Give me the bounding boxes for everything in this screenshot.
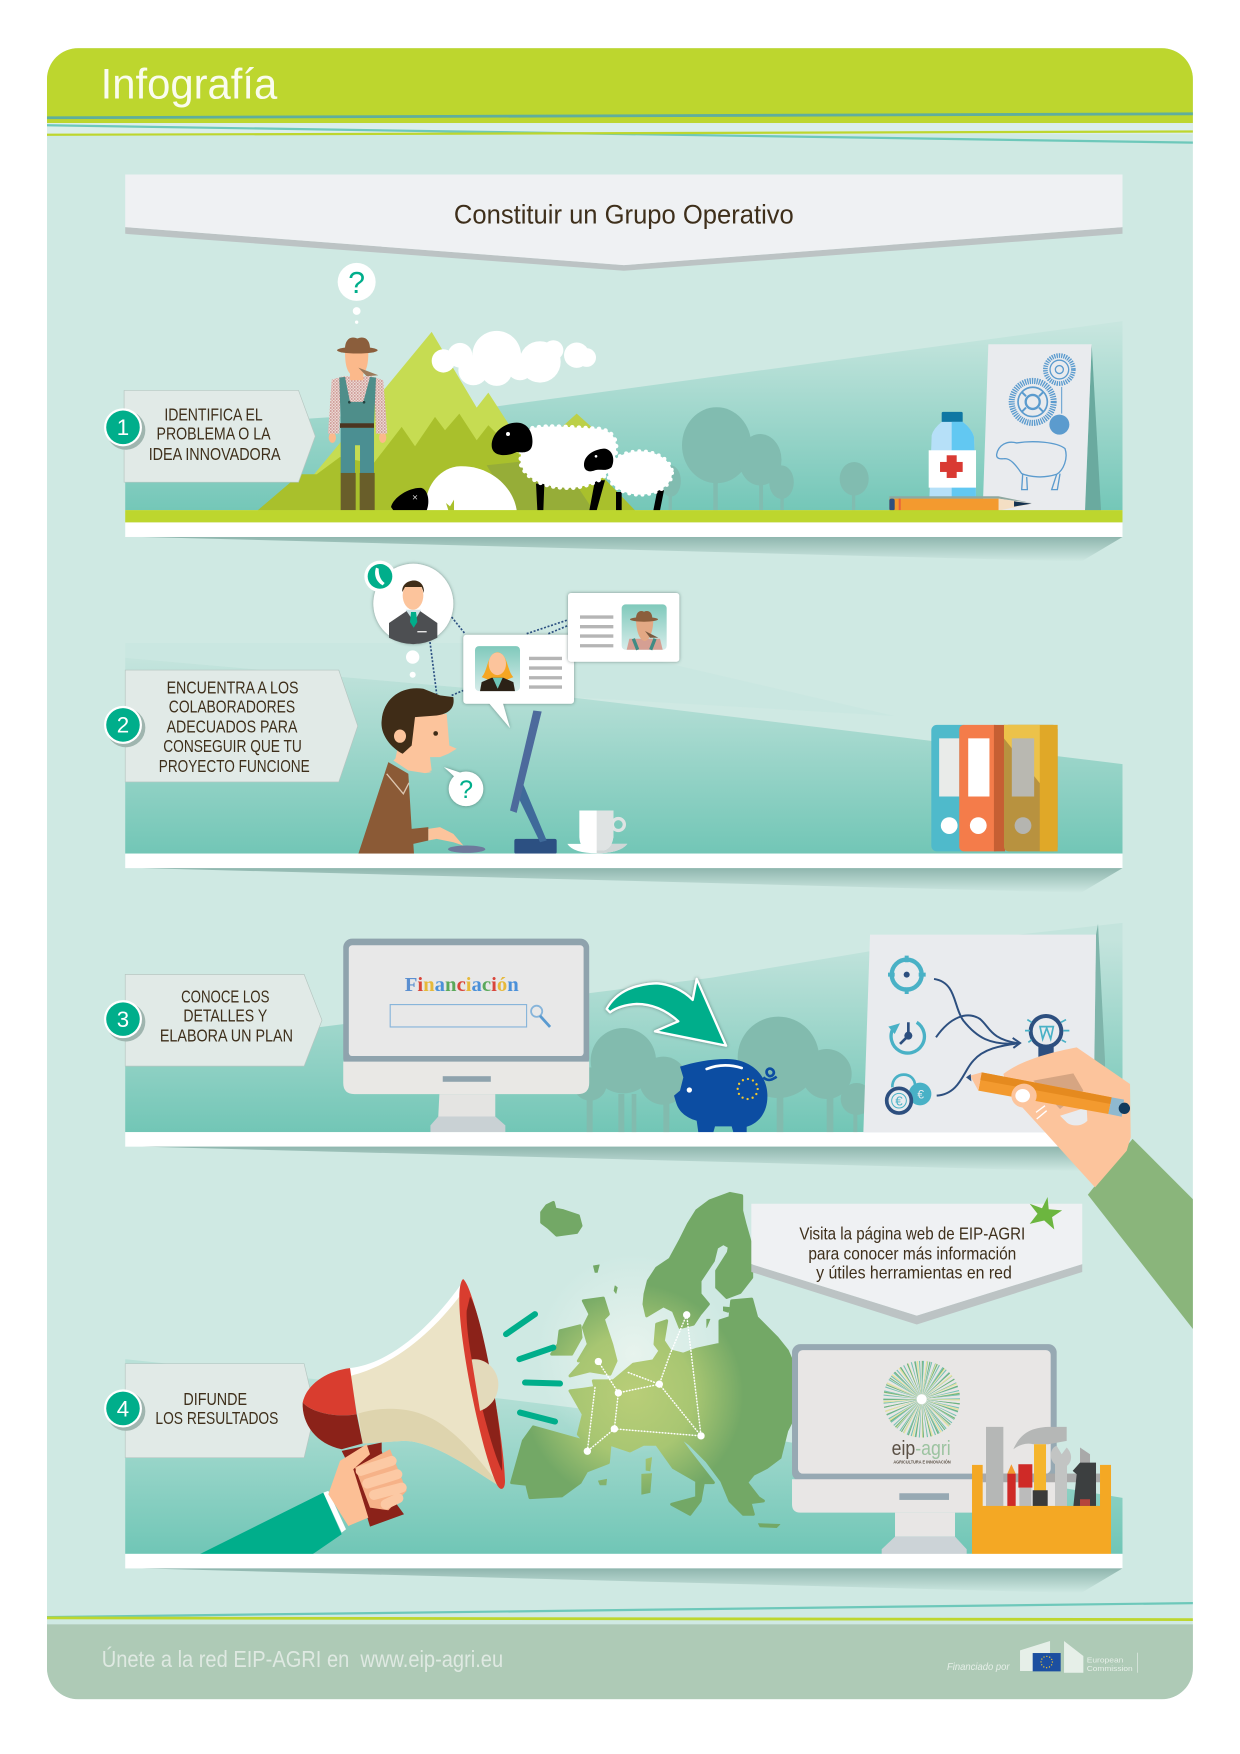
step 4 number: [104, 1389, 145, 1431]
contact card: woman: [463, 635, 574, 728]
step 4 label: LOS RESULTADOS: [155, 1408, 278, 1428]
icon: desktop monitor with search: [343, 939, 589, 1132]
step 3 label: ELABORA UN PLAN: [160, 1025, 293, 1046]
mountains: [258, 332, 635, 510]
step 4 number: 4: [117, 1396, 129, 1421]
icon: farmer: [328, 338, 387, 510]
banner: Constituir un Grupo Operativo: Constituir un Grupo Operativo: [454, 200, 794, 230]
step 2 number: [104, 706, 145, 747]
shelf: [125, 1554, 1122, 1593]
banner: Constituir un Grupo Operativo: [125, 175, 1122, 271]
icon: medicine bottle: [929, 412, 976, 499]
step 1 label: PROBLEMA O LA: [157, 424, 271, 444]
step 2 label: COLABORADORES: [169, 697, 295, 717]
question bubble: [338, 263, 376, 324]
icon: piggy bank: [674, 1059, 777, 1132]
callout: EIP-AGRI web: [751, 1204, 1082, 1325]
step 4 label: [125, 1364, 315, 1458]
icon: monitor with EIP-AGRI logo: AGRICULTURA E INNOVACIÓN: [893, 1458, 951, 1465]
dotted connection lines: [430, 617, 568, 695]
header band: [47, 48, 1193, 144]
trees: [661, 407, 869, 510]
step 1 number: 1: [117, 415, 129, 440]
step 2 label: PROYECTO FUNCIONE: [159, 756, 310, 776]
icon: pencil: [889, 496, 1032, 511]
logo: European Commission: Commission: [1087, 1664, 1133, 1673]
logo: European Commission: [1020, 1641, 1138, 1673]
shelf: [125, 854, 1122, 893]
scene 3: plan: [104, 923, 1193, 1329]
scene 1: identify problem: [104, 263, 1122, 562]
step 2 label: [125, 670, 358, 782]
logo: European Commission: European: [1087, 1655, 1123, 1664]
contact card: farmer: [568, 593, 679, 662]
shelf: [125, 1132, 1122, 1171]
step 2 label: CONSEGUIR QUE TU: [163, 736, 302, 756]
arrow: [607, 979, 726, 1046]
step 2 label: ENCUENTRA A LOS: [167, 678, 299, 698]
step 3 label: [125, 974, 322, 1066]
icon: monitor side view: [510, 710, 557, 854]
icon: coffee cup: [567, 811, 627, 853]
poster: plan diagram: €: [917, 1088, 924, 1102]
step 4 label: DIFUNDE: [183, 1389, 247, 1409]
callout: EIP-AGRI web: para conocer más información: [808, 1244, 1016, 1264]
step 3 label: DETALLES Y: [183, 1005, 267, 1025]
scene 4: disseminate: [104, 1193, 1122, 1593]
scene 2: find collaborators: [104, 561, 1122, 893]
contact bubble: man in suit: [364, 561, 453, 678]
icon: megaphone with hand: [196, 1279, 505, 1556]
icon: monitor with EIP-AGRI logo: eip-agri: [892, 1438, 951, 1460]
icon: binders: [931, 725, 1058, 851]
step 1 label: IDENTIFICA EL: [164, 405, 263, 425]
icon: person at computer: [358, 688, 485, 854]
callout: EIP-AGRI web: Visita la página web de EIP-AGRI: [799, 1224, 1025, 1244]
icon: monitor with EIP-AGRI logo: [792, 1344, 1057, 1555]
poster: plan diagram: [863, 924, 1105, 1132]
icon: toolbox: [972, 1427, 1111, 1555]
speech bubble: question: [444, 767, 483, 806]
icon: star: [1030, 1197, 1062, 1229]
icon: sheep: [391, 423, 672, 510]
poster: gears and sheep: [983, 344, 1101, 510]
callout: EIP-AGRI web: y útiles herramientas en red: [816, 1263, 1012, 1283]
step 1 label: [124, 390, 315, 482]
step 2 label: ADECUADOS PARA: [167, 717, 297, 737]
question bubble: ?: [348, 267, 365, 300]
title: Infografía: [101, 61, 278, 108]
step 2 number: 2: [117, 713, 129, 738]
map of Europe with network: [512, 1193, 792, 1528]
icon: hand with pencil: [966, 1047, 1131, 1187]
poster: plan diagram: €: [895, 1093, 903, 1108]
step 3 label: CONOCE LOS: [181, 986, 269, 1006]
footer text: Únete a la red EIP-AGRI en www.eip-agri.eu: [102, 1646, 503, 1672]
word: Financiación: Financiación: [405, 974, 519, 996]
step 1 label: IDEA INNOVADORA: [149, 444, 281, 464]
step 3 number: [104, 1000, 145, 1042]
speech bubble: question: ?: [459, 776, 473, 804]
sleeve: green arm: [1088, 1139, 1193, 1329]
step 1 number: [104, 408, 145, 450]
footer band: [47, 1602, 1193, 1699]
funded by label: Financiado por: [947, 1662, 1010, 1673]
trees: [573, 1017, 873, 1132]
sound lines: [506, 1314, 560, 1422]
cloud: [432, 331, 596, 386]
step 3 number: 3: [117, 1007, 129, 1032]
ground and shelf: [125, 510, 1122, 562]
